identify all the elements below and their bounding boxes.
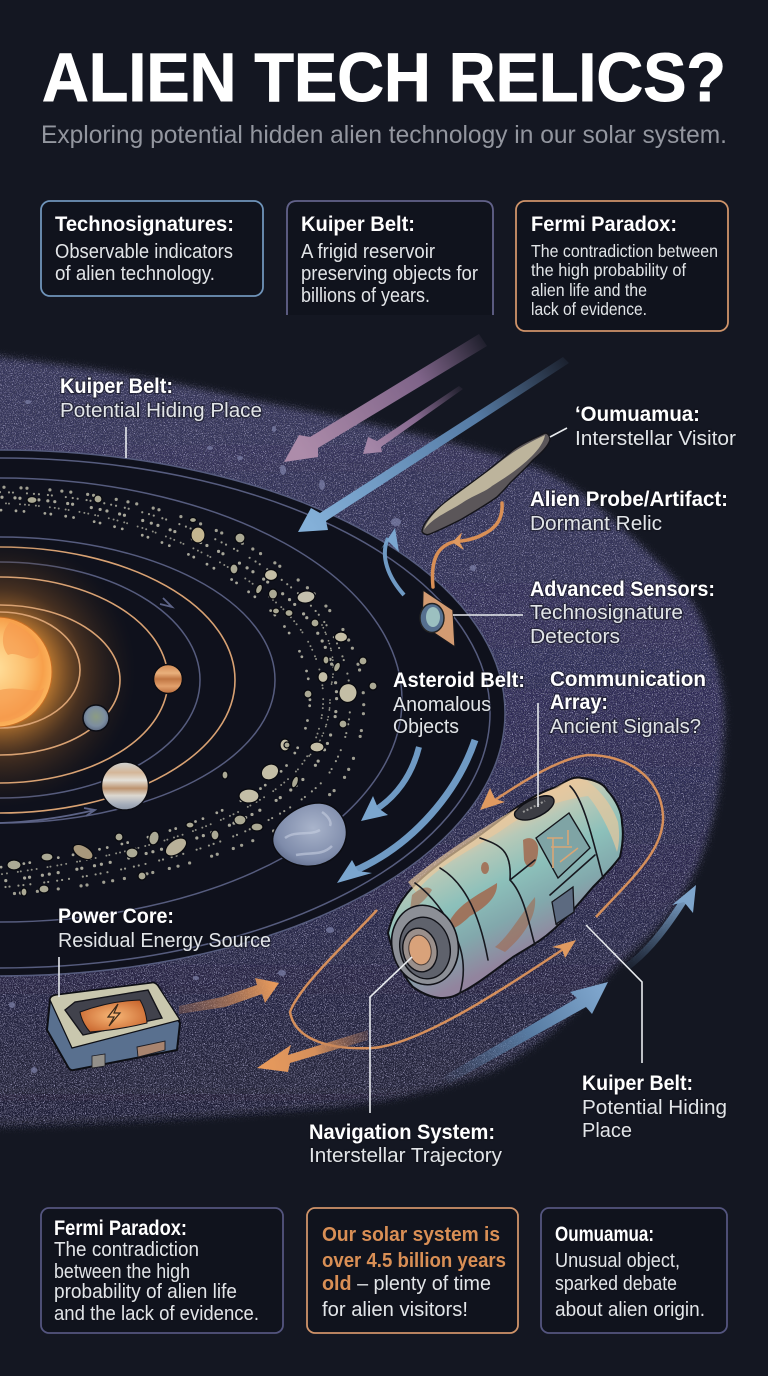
arrow: small blue curved: [381, 528, 404, 595]
label: kuiper belt lower: Place: [582, 1120, 632, 1142]
label: oumuamua: Interstellar Visitor: [575, 428, 736, 450]
alien relic cylinder: [384, 777, 623, 998]
panel: fermi paradox top: lack of evidence.: [531, 299, 647, 319]
panel: kuiper belt definition: A frigid reservoir: [301, 241, 435, 263]
label: oumuamua: ‘Oumuamua:: [575, 403, 700, 426]
label: asteroid belt: [393, 669, 525, 738]
label: alien probe: [530, 488, 728, 535]
planet: orange: [154, 664, 182, 694]
cylinder: highlights: [408, 779, 619, 892]
label: navigation system: Interstellar Trajectory: [309, 1145, 502, 1167]
panel: fermi paradox top: [516, 201, 728, 331]
cylinder: nozzle rings: [384, 899, 466, 991]
cylinder: panel seams: [415, 786, 603, 993]
label: navigation system: [309, 957, 502, 1167]
panel: oumuamua bottom: Unusual object,: [555, 1250, 680, 1272]
asteroid-belt arrows: [337, 740, 475, 883]
panel: kuiper belt definition: billions of years.: [301, 285, 430, 307]
panel: technosignatures: [41, 201, 263, 296]
panel: fermi paradox bottom: [41, 1208, 283, 1333]
orbit rings: [0, 450, 505, 976]
panel: technosignatures: Observable indicators: [55, 241, 233, 263]
label: asteroid belt: Asteroid Belt:: [393, 669, 525, 692]
label: power core: Residual Energy Source: [58, 930, 271, 952]
panel: solar system age callout: Our solar system is: [322, 1224, 500, 1246]
label: advanced sensors: [453, 578, 715, 648]
panel: solar system age callout: over 4.5 billion years: [322, 1250, 506, 1272]
cylinder: communication array vent: [515, 796, 554, 820]
panel: oumuamua bottom: [541, 1208, 727, 1333]
label: kuiper belt upper: [60, 375, 262, 458]
icon: sun: [0, 617, 52, 727]
power core: [47, 983, 180, 1070]
subtitle: Exploring potential hidden alien technology in our solar system.: [41, 121, 727, 149]
arrow: power core outflow: [179, 978, 279, 1014]
arrow: large blue: [298, 357, 569, 532]
label: kuiper belt lower: [582, 925, 727, 1142]
planet: rocky: [83, 705, 109, 731]
panel: fermi paradox top: the high probability of: [531, 260, 686, 280]
label: communication array: Ancient Signals?: [550, 716, 701, 738]
panel: solar system age callout: [307, 1208, 518, 1333]
label: advanced sensors: Advanced Sensors:: [530, 578, 715, 601]
panel: oumuamua bottom: Oumuamua:: [555, 1223, 654, 1246]
label: communication array: Array:: [550, 691, 608, 714]
panel: oumuamua bottom: sparked debate: [555, 1273, 677, 1295]
panel: fermi paradox bottom: probability of alien life: [54, 1281, 237, 1303]
panel: fermi paradox top: Fermi Paradox:: [531, 213, 677, 236]
inner solar system disc: [0, 450, 505, 976]
icon: advanced sensor: [420, 590, 455, 647]
panel: solar system age callout: old – plenty of time: [322, 1273, 491, 1295]
panel: fermi paradox bottom: between the high: [54, 1261, 190, 1283]
label: power core: Power Core:: [58, 905, 174, 928]
arrow: large orange left: [257, 1030, 368, 1072]
cylinder: side hatch: [552, 887, 574, 924]
sun glow: [0, 537, 135, 807]
panel: technosignatures: of alien technology.: [55, 263, 215, 285]
label: asteroid belt: Objects: [393, 716, 459, 738]
label: kuiper belt upper: Potential Hiding Place: [60, 400, 262, 422]
panel: fermi paradox top: The contradiction between: [531, 241, 718, 261]
arrow: lower blue: [444, 982, 608, 1084]
orbit direction arrows: [0, 598, 172, 823]
cylinder: rust patches: [410, 838, 538, 952]
panel: kuiper belt definition: [287, 201, 493, 315]
belt debris: [9, 400, 476, 1073]
label: communication array: Communication: [550, 668, 706, 691]
label: power core: [58, 905, 271, 997]
panel: kuiper belt definition: preserving objects for: [301, 263, 478, 285]
label: communication array: [538, 668, 706, 807]
arrow: orange probe: [432, 503, 502, 587]
inner orbits: [0, 577, 168, 783]
label: alien probe: Dormant Relic: [530, 513, 662, 535]
kuiper belt band: [0, 353, 726, 1128]
arrow: orange orbit loop: [290, 910, 576, 1048]
large asteroid: [273, 803, 346, 866]
panel: oumuamua bottom: about alien origin.: [555, 1299, 705, 1321]
label: oumuamua: [550, 403, 736, 450]
panel: fermi paradox bottom: and the lack of evidence.: [54, 1303, 259, 1325]
panel: fermi paradox top: alien life and the: [531, 280, 647, 300]
label: advanced sensors: Technosignature: [530, 602, 683, 624]
cylinder: glyph panel: [536, 813, 590, 878]
label: kuiper belt lower: Potential Hiding: [582, 1097, 727, 1119]
label: kuiper belt lower: Kuiper Belt:: [582, 1072, 693, 1095]
planet: banded giant: [102, 762, 148, 810]
label: advanced sensors: Detectors: [530, 626, 620, 648]
arrow: orange top arc: [480, 755, 663, 917]
label: alien probe: Alien Probe/Artifact:: [530, 488, 728, 511]
arrow: upper blue: [627, 885, 696, 967]
panel: fermi paradox bottom: Fermi Paradox:: [54, 1217, 187, 1240]
panel: kuiper belt definition: Kuiper Belt:: [301, 213, 415, 236]
relic: oumuamua: [422, 433, 550, 535]
arrow: small purple: [363, 386, 463, 454]
label: kuiper belt upper: Kuiper Belt:: [60, 375, 173, 398]
panel: technosignatures: Technosignatures:: [55, 213, 234, 236]
asteroid belt: [0, 487, 377, 896]
arrow: large purple: [284, 334, 487, 462]
title: ALIEN TECH RELICS?: [42, 39, 726, 116]
label: navigation system: Navigation System:: [309, 1121, 495, 1144]
label: asteroid belt: Anomalous: [393, 694, 491, 716]
panel: fermi paradox bottom: The contradiction: [54, 1239, 199, 1261]
panel: solar system age callout: for alien visitors!: [322, 1299, 468, 1321]
